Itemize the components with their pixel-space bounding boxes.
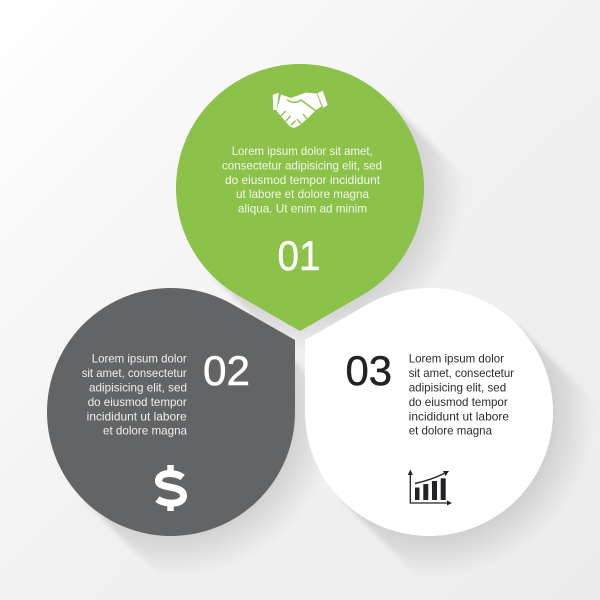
description text: et dolore magna <box>103 424 187 438</box>
green teardrop <box>176 64 424 331</box>
icon: bar chart with arrow <box>408 470 452 506</box>
panel: step 02 <box>47 288 295 536</box>
description text: adipisicing elit, sed <box>409 380 506 394</box>
description text: Lorem ipsum dolor <box>409 352 504 366</box>
description text: incididunt ut labore <box>87 409 187 423</box>
description text <box>82 352 187 438</box>
number 01: 01 <box>278 232 320 279</box>
description text: ut labore et dolore magna <box>236 187 369 201</box>
description text <box>409 352 514 438</box>
description text: adipisicing elit, sed <box>89 380 187 394</box>
panel: step 01 <box>176 64 424 331</box>
white teardrop <box>305 288 553 536</box>
description text: consectetur adipisicing elit, sed <box>222 158 382 172</box>
description text: et dolore magna <box>409 424 492 438</box>
number 02: 02 <box>203 347 250 394</box>
description text: aliqua. Ut enim ad minim <box>238 202 367 216</box>
description text <box>222 144 382 216</box>
icon: dollar sign <box>158 465 184 511</box>
dark teardrop <box>47 288 295 536</box>
description text: Lorem ipsum dolor <box>92 352 187 366</box>
description text: do eiusmod tempor incididunt <box>225 173 381 187</box>
description text: do eiusmod tempor <box>409 395 508 409</box>
description text: sit amet, consectetur <box>409 366 514 380</box>
long shadows <box>83 100 594 577</box>
panel: step 03 <box>305 288 553 536</box>
icon: handshake <box>273 91 328 128</box>
number 03: 03 <box>346 347 392 394</box>
description text: sit amet, consectetur <box>82 366 187 380</box>
description text: incididunt ut labore <box>409 409 509 423</box>
description text: do eiusmod tempor <box>88 395 187 409</box>
description text: Lorem ipsum dolor sit amet, <box>232 144 373 158</box>
